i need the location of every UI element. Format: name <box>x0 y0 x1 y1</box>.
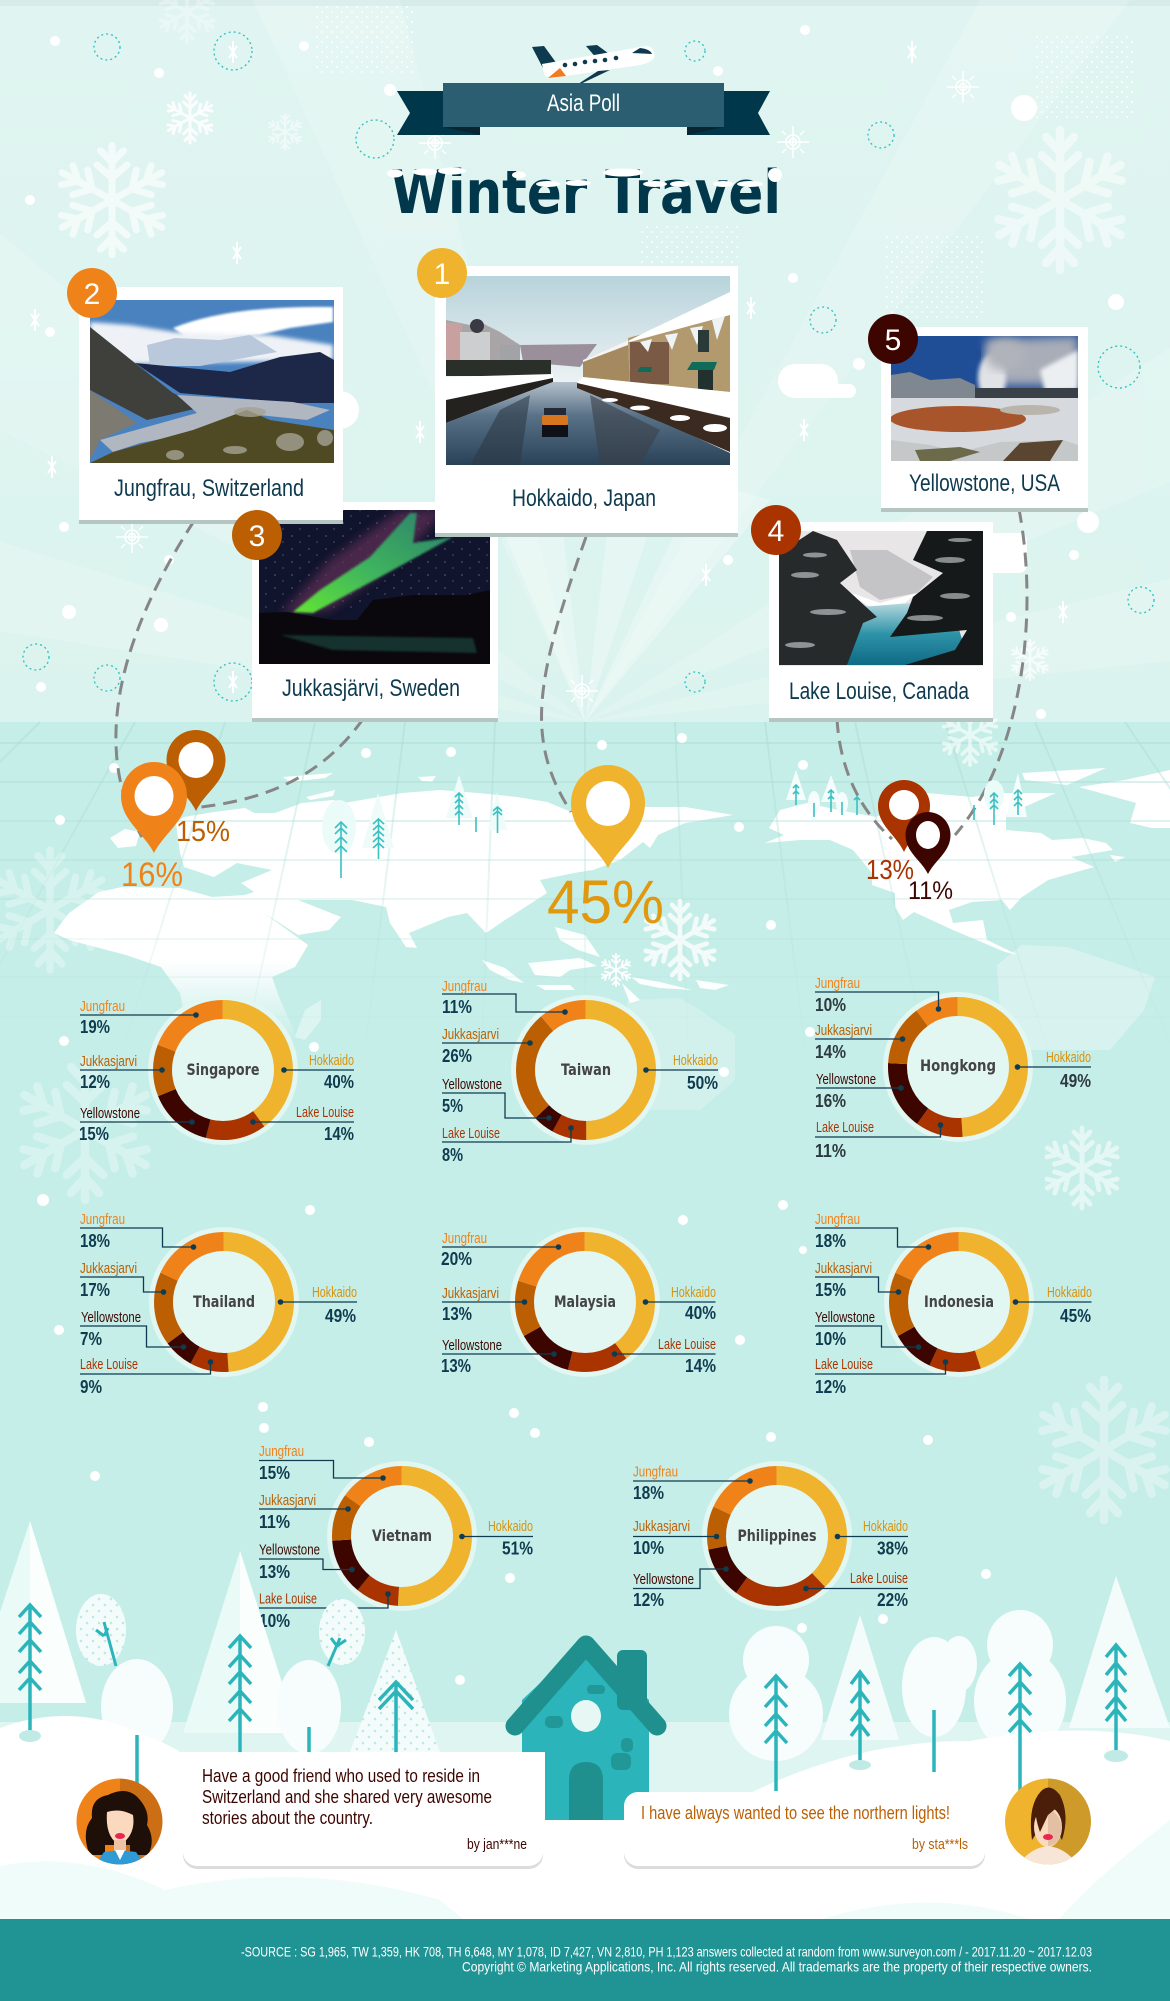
callouts <box>633 1464 908 1610</box>
callouts: Lake Louise <box>442 1125 500 1142</box>
comment bubble: jan***ne: Have a good friend who used to reside in <box>202 1766 480 1786</box>
map pin: Jukkasjärvi 15% <box>166 730 230 848</box>
rank badge 4: 4 <box>768 515 784 548</box>
rank badge 2: 2 <box>84 278 100 311</box>
callouts <box>442 978 718 1165</box>
callouts <box>80 1211 357 1397</box>
world map <box>0 722 1170 1110</box>
photo card 2: Jungfrau <box>79 287 343 524</box>
donut panel: Malaysia <box>441 1227 716 1377</box>
photo: geyser <box>890 336 1078 461</box>
white cloud shapes behind cards <box>321 364 1027 573</box>
callouts: 45% <box>1060 1306 1091 1326</box>
callouts: Lake Louise <box>296 1104 354 1121</box>
callouts: Hokkaido <box>312 1284 357 1301</box>
donut chart: Singapore <box>186 1060 260 1079</box>
donut chart <box>510 1227 660 1377</box>
rank badge 4 <box>751 505 801 555</box>
callouts: 38% <box>877 1538 908 1558</box>
photo card 5: Yellowstone <box>881 327 1088 512</box>
map pin: Jungfrau 16%: 16% <box>121 856 183 894</box>
decorative sparkle markers <box>31 41 1067 707</box>
callouts: Lake Louise <box>850 1570 908 1587</box>
title: Winter Travel: Winter Travel <box>391 158 781 228</box>
donut panel: Taiwan <box>442 978 718 1165</box>
donut chart: Malaysia <box>554 1292 616 1311</box>
landscape: background trees <box>0 1521 1170 1761</box>
dashed route lines <box>116 509 1027 839</box>
donut chart: Thailand <box>193 1292 255 1311</box>
comment bubble: jan***ne <box>183 1752 543 1869</box>
rank badge 2 <box>67 268 117 318</box>
callouts: 18% <box>815 1231 846 1251</box>
donut chart <box>148 995 298 1145</box>
callouts: 14% <box>685 1356 716 1376</box>
footer bar <box>0 1919 1170 2001</box>
callouts: Jukkasjarvi <box>442 1285 499 1302</box>
caption: Lake Louise, Canada <box>789 678 970 705</box>
callouts: 16% <box>815 1091 846 1111</box>
callouts: Jungfrau <box>80 1211 125 1228</box>
map pin: Lake Louise 13% <box>866 780 930 885</box>
photo: lake <box>779 531 983 666</box>
map grid lines <box>0 722 1170 1090</box>
callouts: Jukkasjarvi <box>815 1260 872 1277</box>
callouts: Jungfrau <box>442 1230 487 1247</box>
callouts: Jungfrau <box>80 998 125 1015</box>
callouts: 15% <box>815 1280 846 1300</box>
header: ribbon banner <box>397 83 770 135</box>
callouts: 11% <box>442 997 472 1017</box>
photo card 3: Jukkasjärvi <box>252 502 498 722</box>
callouts: Yellowstone <box>442 1076 502 1093</box>
callouts: 40% <box>685 1303 716 1323</box>
rank badge 3: 3 <box>249 520 265 553</box>
callouts: 12% <box>80 1072 110 1092</box>
callouts <box>79 998 354 1144</box>
callouts: 22% <box>877 1590 908 1610</box>
callouts: 12% <box>815 1377 846 1397</box>
donut panel: Thailand <box>80 1211 357 1397</box>
callouts: 5% <box>442 1096 463 1116</box>
donut chart: Hongkong <box>920 1056 996 1075</box>
callouts: Jukkasjarvi <box>815 1022 872 1039</box>
map pin: Hokkaido 45%: 45% <box>547 868 664 936</box>
callouts: 18% <box>633 1483 664 1503</box>
callouts: 20% <box>441 1249 472 1269</box>
map trees <box>322 770 1027 878</box>
donut chart <box>702 1461 852 1611</box>
avatar: woman with curly hair <box>76 1778 164 1865</box>
donut panel: Hongkong <box>815 975 1091 1161</box>
callouts: Yellowstone <box>633 1571 694 1588</box>
callouts: Yellowstone <box>81 1309 141 1326</box>
callouts: Lake Louise <box>658 1336 716 1353</box>
donut chart: Taiwan <box>561 1060 611 1079</box>
callouts: 15% <box>259 1463 290 1483</box>
photo card 1: Hokkaido <box>435 266 738 537</box>
decorative dot patterns <box>313 5 1133 318</box>
callouts: Jukkasjarvi <box>442 1026 499 1043</box>
falling snow dots <box>25 25 1124 1685</box>
rank badge 3 <box>232 510 282 560</box>
donut chart: Philippines <box>738 1526 816 1545</box>
rank badge 1 <box>417 248 467 298</box>
comment bubble: sta***ls: by sta***ls <box>912 1836 968 1853</box>
landscape: snow hills <box>0 1716 1170 1925</box>
callouts: Hokkaido <box>1047 1284 1092 1301</box>
landscape: foreground tree stems <box>19 1605 1128 1791</box>
map pin: Hokkaido 45% <box>547 765 664 936</box>
map pin: Yellowstone 11% <box>906 812 953 905</box>
callouts: 10% <box>259 1611 290 1631</box>
callouts: Hokkaido <box>488 1518 533 1535</box>
header: airplane <box>532 45 654 88</box>
photo: aurora <box>259 510 490 664</box>
caption: Hokkaido, Japan <box>512 485 656 512</box>
donut panel: Indonesia <box>815 1211 1092 1397</box>
callouts: Jungfrau <box>259 1443 304 1460</box>
callouts: 51% <box>502 1538 533 1558</box>
comment bubble: jan***ne: Switzerland and she shared very awesome <box>202 1787 492 1807</box>
donut panel: Singapore <box>79 995 354 1145</box>
callouts: 7% <box>80 1329 102 1349</box>
callouts: 11% <box>815 1141 846 1161</box>
callouts: 50% <box>687 1073 718 1093</box>
callouts: 49% <box>325 1306 356 1326</box>
callouts: Jungfrau <box>633 1464 678 1480</box>
callouts <box>259 1443 533 1631</box>
callouts: Hokkaido <box>671 1284 716 1301</box>
caption: Jukkasjärvi, Sweden <box>282 675 460 702</box>
callouts: 9% <box>80 1377 102 1397</box>
callouts: 12% <box>633 1590 664 1610</box>
decorative dashed rings <box>23 32 1154 701</box>
photo: glacier <box>90 300 334 463</box>
callouts: Jungfrau <box>815 1211 860 1228</box>
background: map section <box>0 722 1170 1722</box>
callouts: Hokkaido <box>863 1518 908 1535</box>
callouts: Yellowstone <box>259 1542 320 1558</box>
callouts: 15% <box>79 1124 109 1144</box>
callouts: Yellowstone <box>80 1105 140 1122</box>
comment bubble: sta***ls: I have always wanted to see the northern lights! <box>641 1803 950 1823</box>
map pin: Yellowstone 11%: 11% <box>908 877 953 905</box>
donut panel: Vietnam <box>259 1443 533 1631</box>
donut chart: Indonesia <box>924 1292 994 1311</box>
callouts: 26% <box>442 1046 472 1066</box>
callouts: Jukkasjarvi <box>80 1260 137 1277</box>
donut chart <box>884 1227 1034 1377</box>
callouts: Yellowstone <box>815 1309 875 1326</box>
callouts: 13% <box>259 1562 290 1582</box>
donut chart <box>327 1461 477 1611</box>
callouts: 13% <box>442 1304 472 1324</box>
photo: canal <box>446 276 730 465</box>
callouts <box>441 1230 716 1376</box>
callouts: 17% <box>80 1280 110 1300</box>
background: sky section <box>0 0 1170 722</box>
callouts: 14% <box>324 1124 354 1144</box>
callouts: Lake Louise <box>80 1356 138 1373</box>
avatar: woman with bun <box>1005 1778 1091 1865</box>
callouts: Jungfrau <box>815 975 860 992</box>
callouts: 13% <box>441 1356 471 1376</box>
callouts: Hokkaido <box>673 1052 718 1069</box>
callouts: 10% <box>633 1538 664 1558</box>
callouts: Jukkasjarvi <box>80 1053 137 1070</box>
map pin: Jungfrau 16% <box>121 762 187 894</box>
callouts: Lake Louise <box>816 1119 874 1136</box>
comment bubble: sta***ls <box>624 1792 985 1869</box>
callouts: 18% <box>80 1231 110 1251</box>
callouts: Hokkaido <box>309 1052 354 1069</box>
callouts: Lake Louise <box>815 1356 873 1373</box>
banner text: Asia Poll <box>547 90 620 117</box>
rank badge 5: 5 <box>885 324 901 357</box>
comment bubble: jan***ne: by jan***ne <box>467 1836 527 1853</box>
callouts: 10% <box>815 1329 846 1349</box>
callouts: 40% <box>324 1072 354 1092</box>
callouts: Yellowstone <box>816 1071 876 1088</box>
rank badge 1: 1 <box>434 258 450 291</box>
donut panel: Philippines <box>633 1461 908 1611</box>
callouts: 8% <box>442 1145 463 1165</box>
comment bubble: jan***ne: stories about the country. <box>202 1808 373 1828</box>
callouts <box>815 1211 1092 1397</box>
callouts: 10% <box>815 995 846 1015</box>
map pin: Lake Louise 13%: 13% <box>866 854 914 885</box>
photo card 4: Lake Louise <box>769 522 993 722</box>
rank badge 5 <box>868 314 918 364</box>
map pin: Jukkasjärvi 15%: 15% <box>176 816 230 848</box>
callouts: 11% <box>259 1512 290 1532</box>
donut chart <box>883 992 1033 1142</box>
callouts <box>815 975 1091 1161</box>
callouts: 19% <box>80 1017 110 1037</box>
callouts: Yellowstone <box>442 1337 502 1354</box>
callouts: Jukkasjarvi <box>259 1492 316 1509</box>
caption: Jungfrau, Switzerland <box>114 475 304 502</box>
donut chart: Vietnam <box>372 1526 432 1545</box>
caption: Yellowstone, USA <box>909 470 1060 497</box>
house <box>515 1640 657 1820</box>
callouts: 14% <box>815 1042 846 1062</box>
callouts: Jungfrau <box>442 978 487 995</box>
callouts: Jukkasjarvi <box>633 1518 690 1535</box>
callouts: 49% <box>1060 1071 1091 1091</box>
donut chart <box>511 995 661 1145</box>
donut chart <box>149 1227 299 1377</box>
callouts: Lake Louise <box>259 1590 317 1608</box>
callouts: Hokkaido <box>1046 1049 1091 1066</box>
